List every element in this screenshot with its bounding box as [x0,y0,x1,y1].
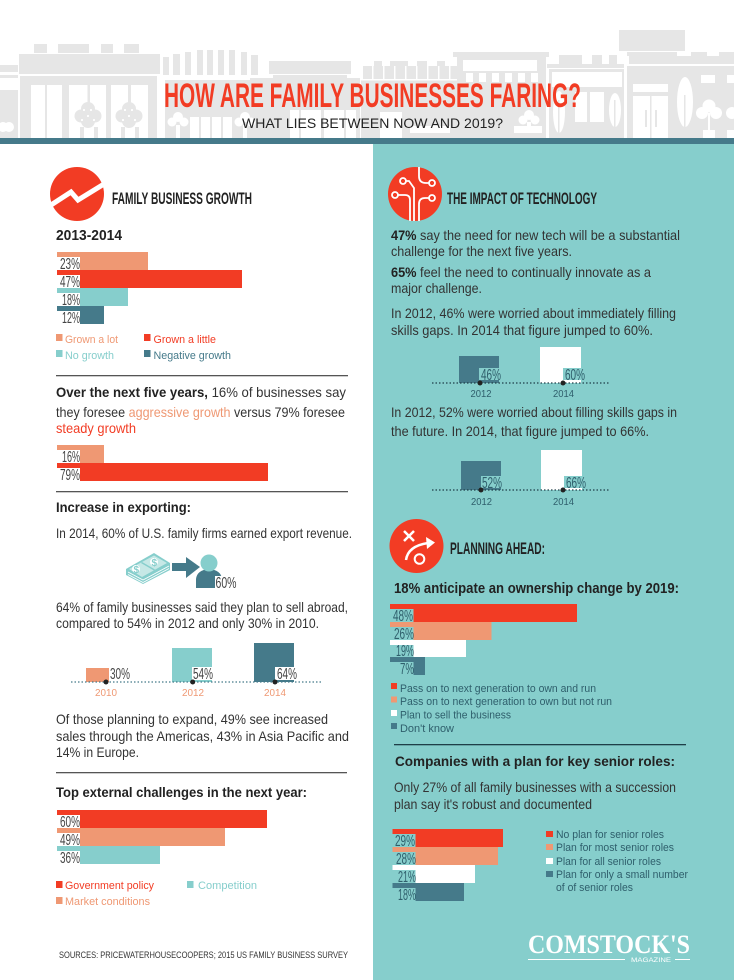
text: plan to sell abroad [56,599,348,631]
legend: ownership change [391,683,612,735]
icon: play diagram [390,519,444,573]
bar chart: 2013-2014 growth: 23% [60,256,80,273]
legend: external challenges: Market conditions [65,896,150,908]
sources: SOURCES: PRICEWATERHOUSECOOPERS; 2015 US FAMILY BUSINESS SURVEY [59,950,349,961]
bar chart: ownership change [390,604,577,678]
text: tech statistics: skills gaps. In 2014 that figure jumped to 60%. [391,322,653,338]
bar chart: selling abroad by year: 54% [193,666,213,683]
legend: external challenges: Government policy [65,880,154,892]
legend: ownership change: Pass on to next generation to own but not run [400,696,612,708]
bar chart: selling abroad by year: 2014 [264,688,286,699]
text: expansion regions: Of those planning to expand, 49% see increased [56,711,328,727]
bar chart: 2013-2014 growth: 18% [62,292,80,309]
legend: senior roles: of of senior roles [556,882,633,894]
bar chart: external challenges [57,810,267,867]
heading: impact of technology: THE IMPACT OF TECHNOLOGY [447,190,597,208]
bar chart: ownership change: 48% [393,608,413,625]
legend: growth: Negative growth [154,350,231,362]
bar chart: external challenges: 60% [60,814,80,831]
bar chart: senior roles: 18% [398,887,416,904]
bar chart: future skills gaps [432,450,609,508]
bar chart: selling abroad by year: 2010 [95,688,117,699]
header band [0,138,734,144]
icon: growth line [50,167,104,221]
bar chart: future skills gaps: 2014 [553,497,574,508]
bar chart: ownership change: 19% [396,643,414,660]
bar chart: senior roles [392,829,503,904]
bar chart: 2013-2014 growth: 47% [60,274,80,291]
text: tech statistics: 47% say the need for new tech will be a substantial [391,227,680,243]
panel: right teal background [373,144,734,980]
bar chart: five year outlook [57,445,268,484]
logo: Comstock's Magazine: MAGAZINE [631,957,672,964]
legend: growth: Grown a lot [65,334,118,346]
text: future skills gaps: In 2012, 52% were worried about filling skills gaps in [391,404,677,420]
icon: money to person: 60% [216,575,236,592]
text: tech statistics: major challenge. [391,280,482,296]
legend: senior roles [546,829,688,894]
bar chart: selling abroad by year [71,643,321,699]
bar chart: external challenges: 36% [60,850,80,867]
legend: growth: No growth [65,350,114,362]
text: five year outlook [56,384,346,436]
text: future skills gaps [391,404,677,439]
subtitle: WHAT LIES BETWEEN NOW AND 2019? [242,115,503,131]
subheading: ownership change: 18% anticipate an ownership change by 2019: [394,580,679,597]
text: tech statistics: In 2012, 46% were worried about immediately filling [391,305,676,321]
legend: growth [56,334,231,362]
legend: senior roles: Plan for only a small number [556,869,688,881]
bar chart: future skills gaps: 66% [566,475,586,492]
legend: growth: Grown a little [154,334,216,346]
legend: senior roles: Plan for most senior roles [556,842,674,854]
bar chart: five year outlook: 16% [62,449,80,466]
bar chart: senior roles: 28% [396,851,416,868]
header: storefront skyline [0,30,734,138]
icon: money to person: $ [134,565,140,576]
bar chart: selling abroad by year: 30% [110,666,130,683]
bar chart: senior roles: 21% [398,869,416,886]
panel: planning ahead [390,519,690,964]
text: succession plan: plan say it's robust and documented [394,796,592,812]
text: five year outlook: they foresee aggressive growth versus 79% foresee [56,404,345,420]
bar chart: immediate skills gaps: 2012 [470,389,492,400]
icon: circuit [388,167,442,221]
text: succession plan: Only 27% of all family businesses with a succession [394,779,676,795]
text: plan to sell abroad: compared to 54% in 2012 and only 30% in 2010. [56,615,319,631]
bar chart: senior roles: 29% [395,833,415,850]
bar chart: future skills gaps: 52% [482,475,502,492]
text: five year outlook: steady growth [56,420,136,436]
legend: ownership change: Don't know [400,723,454,735]
bar chart: future skills gaps: 2012 [471,497,492,508]
text: plan to sell abroad: 64% of family businesses said they plan to sell abroad, [56,599,348,615]
text: export revenue: In 2014, 60% of U.S. family firms earned export revenue. [56,525,352,541]
bar chart: 2013-2014 growth [57,252,242,327]
bar chart: selling abroad by year: 2012 [182,688,204,699]
icon: money to person [126,553,237,592]
panel: family business growth [50,167,352,961]
subheading: external challenges: Top external challenges in the next year: [56,784,307,800]
panel: impact of technology [388,167,680,508]
logo: Comstock's Magazine: COMSTOCK'S [528,930,690,959]
legend: ownership change: Plan to sell the business [400,710,511,722]
legend: external challenges: Competition [198,880,257,892]
legend: senior roles: Plan for all senior roles [556,856,661,868]
bar chart: five year outlook: 79% [60,467,80,484]
text: succession plan [394,779,676,812]
text: future skills gaps: the future. In 2014, that figure jumped to 66%. [391,423,649,439]
legend: ownership change: Pass on to next generation to own and run [400,683,596,695]
bar chart: immediate skills gaps [432,347,609,400]
subheading: 2013-2014: 2013-2014 [56,227,123,244]
bar chart: 2013-2014 growth: 12% [62,310,80,327]
text: expansion regions [56,711,349,760]
bar chart: ownership change: 26% [394,626,414,643]
text: expansion regions: sales through the Americas, 43% in Asia Pacific and [56,728,349,744]
legend: external challenges [56,880,257,908]
bar chart: external challenges: 49% [60,832,80,849]
bar chart: immediate skills gaps: 60% [565,367,585,384]
subheading: senior roles: Companies with a plan for key senior roles: [395,753,675,769]
legend: senior roles: No plan for senior roles [556,829,664,841]
bar chart: selling abroad by year: 64% [277,666,297,683]
text: tech statistics: challenge for the next five years. [391,243,572,259]
bar chart: immediate skills gaps: 2014 [553,389,574,400]
subheading: increase in exporting: Increase in exporting: [56,499,191,515]
text: tech statistics [391,227,680,338]
bar chart: immediate skills gaps: 46% [481,367,501,384]
bar chart: ownership change: 7% [400,661,414,678]
text: five year outlook: Over the next five years, 16% of businesses say [56,384,346,400]
text: expansion regions: 14% in Europe. [56,744,139,760]
heading: planning ahead: PLANNING AHEAD: [450,540,545,558]
icon: money to person: $ [152,558,158,569]
heading: family business growth: FAMILY BUSINESS GROWTH [112,190,252,208]
text: tech statistics: 65% feel the need to continually innovate as a [391,264,651,280]
